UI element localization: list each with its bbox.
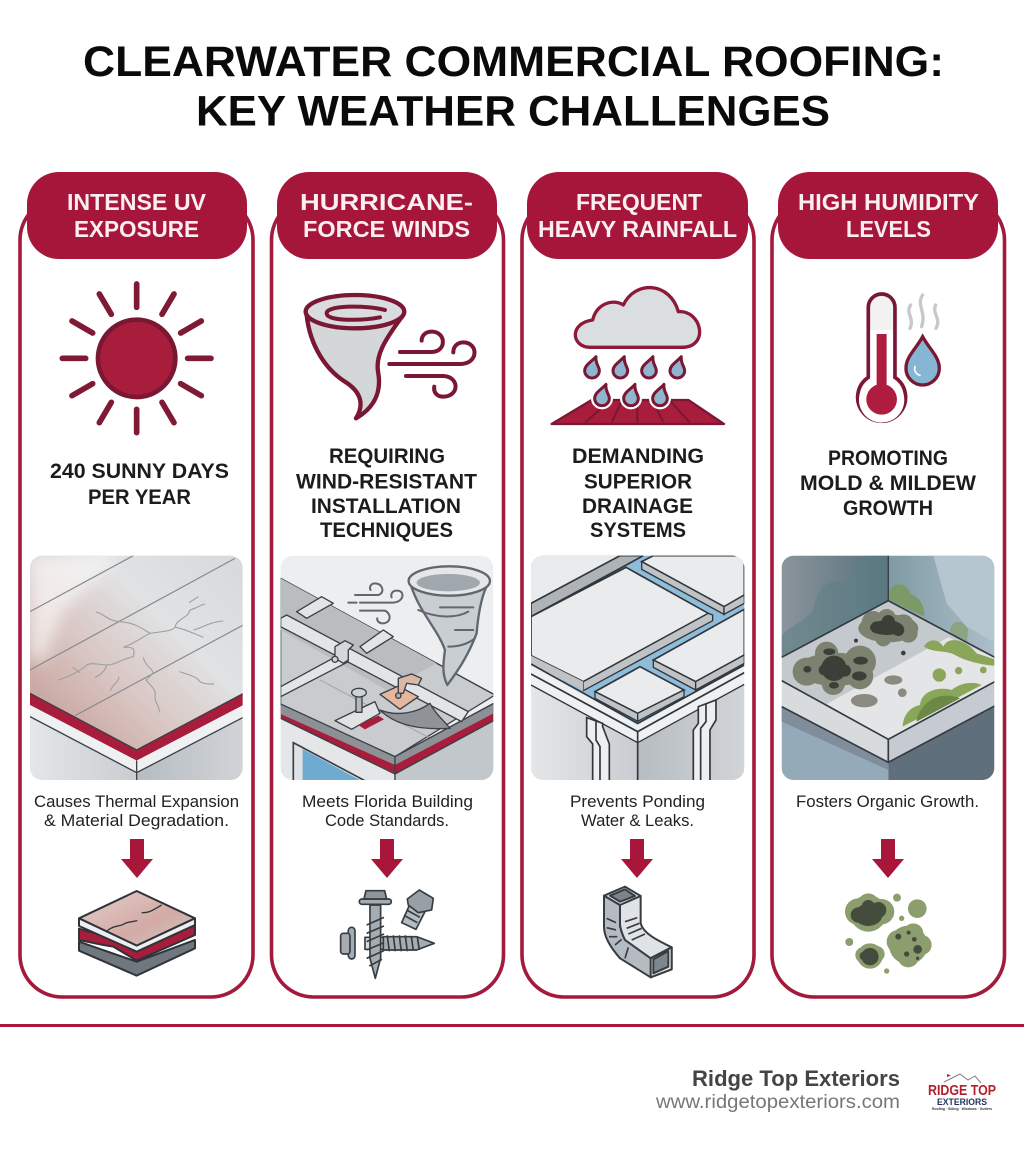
illustration: mold on roof	[782, 556, 997, 783]
text: promoting mold and mildew growth	[800, 447, 976, 520]
header: intense UV exposure: EXPOSURE	[74, 216, 199, 242]
title	[83, 38, 944, 136]
divider	[0, 1024, 1024, 1027]
text: requiring wind-resistant installation techniques	[296, 445, 477, 542]
title: KEY WEATHER CHALLENGES	[196, 88, 830, 136]
text: 240 sunny days per year: 240 SUNNY DAYS	[50, 460, 229, 483]
logo: Ridge Top Exteriors: EXTERIORS	[937, 1097, 987, 1108]
panel: hurricane-force winds	[272, 172, 504, 997]
text: demanding superior drainage systems: SUPERIOR	[584, 470, 692, 494]
text: promoting mold and mildew growth: MOLD & MILDEW	[800, 472, 976, 495]
text: fosters organic growth: Fosters Organic Growth.	[796, 793, 979, 811]
icon: downspout elbow	[604, 887, 672, 977]
header: high humidity levels: LEVELS	[846, 216, 931, 242]
header: frequent heavy rainfall	[527, 172, 748, 259]
icon: rain cloud over roof	[552, 288, 724, 424]
logo: Ridge Top Exteriors: RIDGE TOP	[928, 1083, 996, 1099]
arrow	[621, 839, 653, 878]
text: promoting mold and mildew growth: GROWTH	[843, 497, 933, 520]
icon: screws	[341, 890, 434, 978]
text: promoting mold and mildew growth: PROMOTING	[828, 447, 948, 470]
text: requiring wind-resistant installation techniques: INSTALLATION	[311, 495, 461, 518]
arrow	[371, 839, 403, 878]
text: causes thermal expansion: Causes Thermal Expansion	[34, 793, 239, 811]
illustration: roof fastening system with tornado	[281, 556, 495, 783]
header: intense UV exposure	[27, 172, 247, 259]
header: intense UV exposure: INTENSE UV	[67, 189, 207, 215]
text: meets Florida Building Code: Code Standards.	[325, 812, 449, 830]
text: causes thermal expansion: & Material Degradation.	[44, 812, 229, 830]
text: demanding superior drainage systems: SYSTEMS	[590, 519, 686, 542]
text: causes thermal expansion	[34, 793, 239, 830]
text: prevents ponding water and leaks	[570, 793, 705, 830]
text: demanding superior drainage systems: DRAINAGE	[582, 495, 693, 518]
panel: high humidity levels	[772, 172, 1004, 997]
header: frequent heavy rainfall: HEAVY RAINFALL	[538, 216, 737, 242]
header: hurricane-force winds	[277, 172, 497, 259]
text: requiring wind-resistant installation techniques: REQUIRING	[329, 445, 445, 468]
illustration: cracked roof surface	[30, 550, 247, 783]
text: meets Florida Building Code	[302, 793, 473, 830]
icon: sun	[62, 284, 211, 433]
header: frequent heavy rainfall: FREQUENT	[576, 189, 702, 215]
text: requiring wind-resistant installation techniques: TECHNIQUES	[320, 519, 453, 542]
footer: company name and website: www.ridgetopexteriors.com	[655, 1091, 900, 1113]
title: CLEARWATER COMMERCIAL ROOFING:	[83, 38, 944, 86]
illustration: roof drainage channels	[531, 550, 747, 783]
logo: Ridge Top Exteriors: Roofing · Siding · Windows · Gutters	[932, 1106, 993, 1111]
header: hurricane-force winds: FORCE WINDS	[303, 216, 470, 242]
icon: tornado and wind	[306, 295, 475, 418]
header: high humidity levels: HIGH HUMIDITY	[798, 189, 979, 215]
footer: company name and website: Ridge Top Exteriors	[692, 1066, 900, 1091]
text: demanding superior drainage systems	[572, 445, 704, 542]
text: prevents ponding water and leaks: Water & Leaks.	[581, 812, 694, 830]
header: high humidity levels	[778, 172, 998, 259]
icon: degraded roof layers	[79, 891, 195, 976]
text: 240 sunny days per year: PER YEAR	[88, 486, 191, 509]
text: prevents ponding water and leaks: Prevents Ponding	[570, 793, 705, 811]
panel: intense UV exposure	[20, 172, 253, 997]
logo: Ridge Top Exteriors	[928, 1074, 996, 1111]
icon: mold colonies	[845, 893, 932, 974]
text: requiring wind-resistant installation techniques: WIND-RESISTANT	[296, 470, 477, 494]
arrow	[121, 839, 153, 878]
footer: company name and website	[655, 1066, 900, 1113]
arrow	[872, 839, 904, 878]
panel: frequent heavy rainfall	[522, 172, 754, 997]
text: meets Florida Building Code: Meets Florida Building	[302, 793, 473, 811]
text: demanding superior drainage systems: DEMANDING	[572, 445, 704, 468]
text: 240 sunny days per year	[50, 460, 229, 509]
icon: thermometer and water drop	[858, 294, 939, 423]
header: hurricane-force winds: HURRICANE-	[300, 189, 473, 215]
